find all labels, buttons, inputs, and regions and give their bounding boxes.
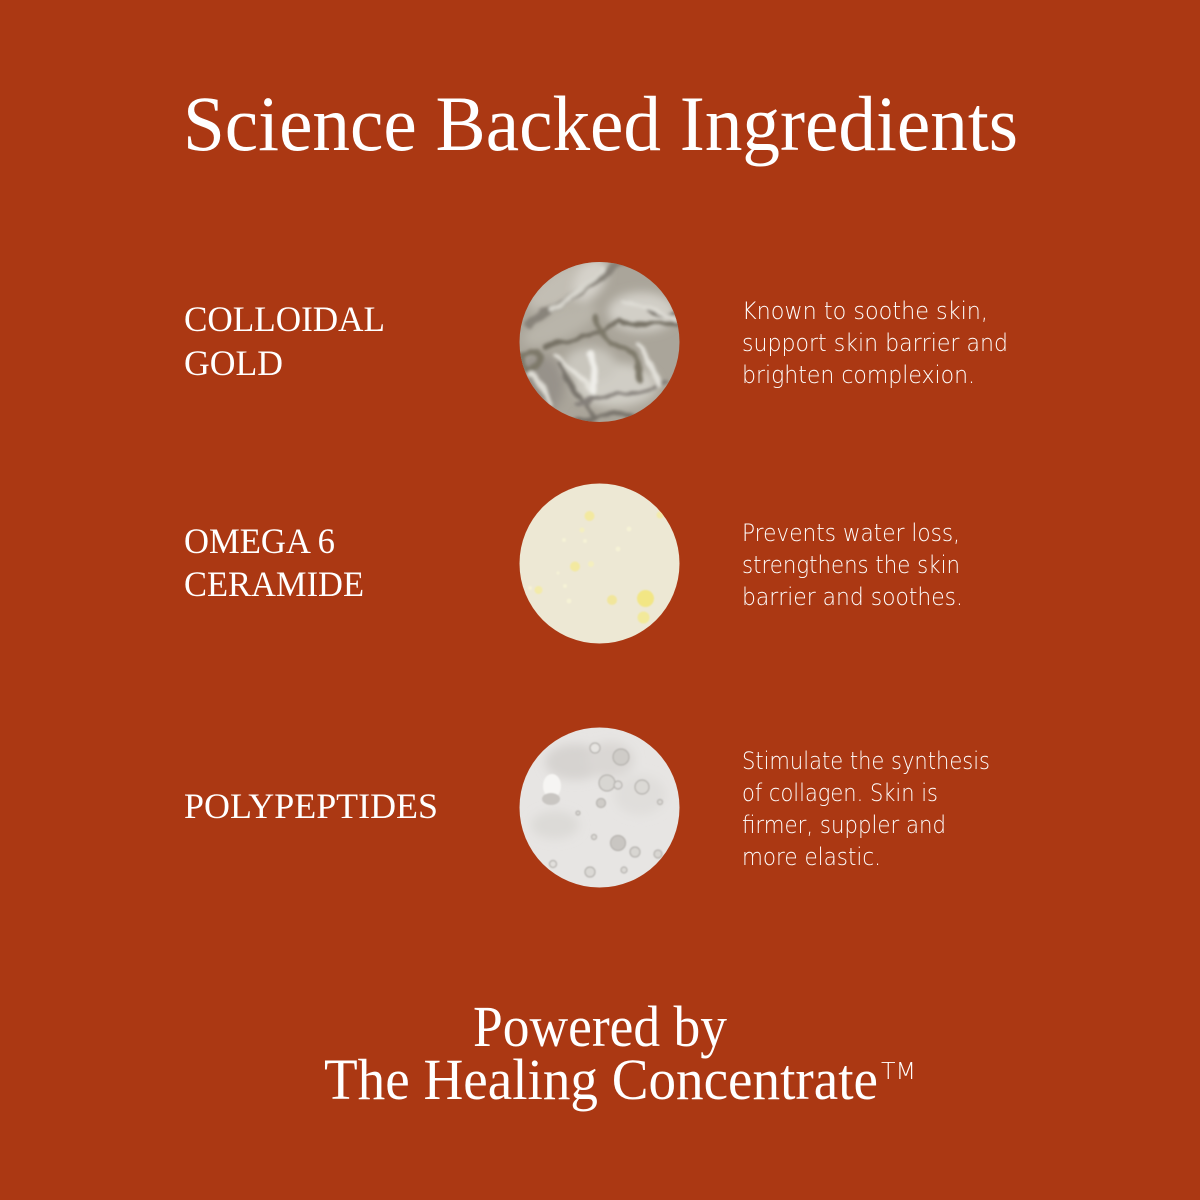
description: colloidal gold: Known to soothe skin, bbox=[742, 297, 988, 325]
title: Science Backed Ingredients bbox=[183, 80, 1018, 167]
label: colloidal gold: COLLOIDAL bbox=[184, 299, 385, 339]
closing tagline: TM bbox=[881, 1059, 916, 1085]
row: omega 6 ceramide bbox=[184, 483, 963, 644]
closing tagline bbox=[324, 994, 916, 1112]
description: omega 6 ceramide bbox=[742, 519, 963, 611]
closing tagline: The Healing Concentrate bbox=[324, 1047, 878, 1112]
description: colloidal gold: support skin barrier and bbox=[742, 329, 1008, 357]
description: omega 6 ceramide: strengthens the skin bbox=[742, 551, 960, 579]
label: colloidal gold bbox=[184, 299, 385, 383]
row: polypeptides bbox=[184, 727, 990, 888]
image: polypeptides bubbles bbox=[519, 727, 680, 888]
description: polypeptides: Stimulate the synthesis bbox=[742, 747, 990, 775]
description: omega 6 ceramide: barrier and soothes. bbox=[742, 583, 963, 611]
description: polypeptides: firmer, suppler and bbox=[742, 811, 946, 839]
infographic canvas bbox=[185, 96, 1016, 1112]
description: colloidal gold: brighten complexion. bbox=[742, 361, 975, 389]
description: polypeptides: more elastic. bbox=[742, 843, 881, 871]
image: colloidal gold swirl bbox=[520, 262, 680, 422]
closing tagline: Powered by bbox=[473, 994, 727, 1059]
image: omega 6 droplets bbox=[519, 483, 680, 644]
description: omega 6 ceramide: Prevents water loss, bbox=[742, 519, 960, 547]
label: omega 6 ceramide bbox=[184, 521, 364, 604]
description: polypeptides: of collagen. Skin is bbox=[742, 779, 938, 807]
label: omega 6 ceramide: OMEGA 6 bbox=[184, 521, 335, 561]
label: omega 6 ceramide: CERAMIDE bbox=[184, 564, 364, 604]
description: polypeptides bbox=[742, 747, 990, 871]
row: colloidal gold bbox=[184, 248, 1008, 423]
label: colloidal gold: GOLD bbox=[184, 343, 283, 383]
description: colloidal gold bbox=[742, 297, 1008, 389]
label: polypeptides: POLYPEPTIDES bbox=[184, 786, 438, 826]
